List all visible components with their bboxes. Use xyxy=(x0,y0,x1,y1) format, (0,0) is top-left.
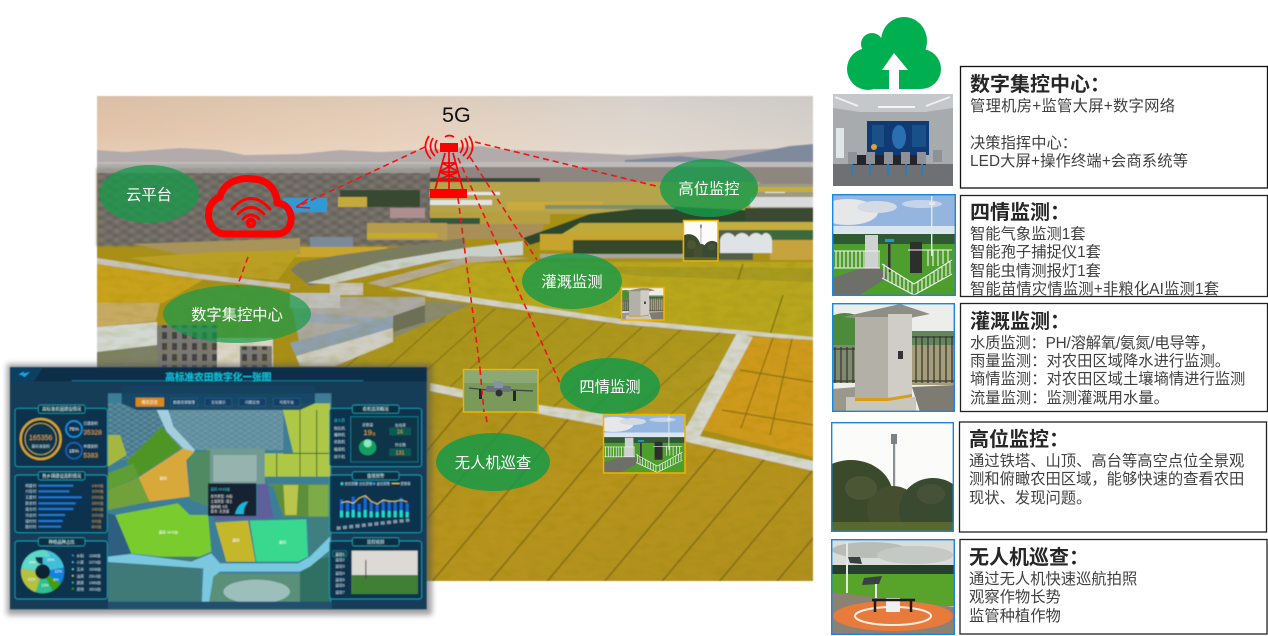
map fields: 播种期: 5月 xyxy=(211,504,228,509)
panel: dashboard screenshot: 虫情预警 xyxy=(367,472,385,479)
card: 无人机巡查: 无人机巡查： xyxy=(969,546,1089,569)
panel: dashboard screenshot: 种植品种占比 xyxy=(49,538,75,545)
panel: dashboard screenshot: 各乡镇建设面积情况 xyxy=(42,472,82,479)
pie chart: crop share: 19% xyxy=(29,560,37,564)
map fields: 土壤类型: 壤土 xyxy=(211,499,233,504)
chart: pest warning bars: 虫情预警 xyxy=(345,481,359,486)
gauge: total area: 35328 xyxy=(83,430,102,437)
gauge: total area: 已建面积 xyxy=(83,420,98,425)
card: 四情监测: 智能气象监测1套 xyxy=(970,225,1086,243)
label: 5G: 5G xyxy=(442,103,471,127)
dashboard panel frames xyxy=(15,408,422,599)
card: 数字集控中心: 决策指挥中心： xyxy=(970,135,1077,152)
thumbnail: tower xyxy=(677,220,722,265)
pie chart: crop share: 1816亩 xyxy=(89,586,101,591)
label bubble: 数字集控中心 xyxy=(163,285,311,343)
video preview: 监控7 xyxy=(335,589,345,594)
label bubble: 灌溉监测: 灌溉监测 xyxy=(541,274,603,291)
card: 四情监测 xyxy=(960,196,1268,298)
pie chart: crop share: 水稻 xyxy=(77,553,84,558)
panel: machinery stats: 播种机 xyxy=(334,432,345,437)
card: 四情监测: 智能苗情灾情监测+非粮化AI监测1套 xyxy=(970,280,1219,298)
panel: machinery stats: 作业数 xyxy=(395,442,406,447)
bar list: township area: 800亩 xyxy=(92,524,102,529)
gauge: total area: 165356 xyxy=(29,435,52,442)
map fields xyxy=(108,403,331,608)
gauge: total area: 高标准面积 xyxy=(32,444,50,449)
pie chart: crop share: 12% xyxy=(55,569,63,573)
label bubble: 四情监测 xyxy=(560,358,660,414)
bar list: township area: 1400亩 xyxy=(92,483,104,488)
map fields: 高标 44.5亩 xyxy=(159,529,178,534)
pie chart: crop share: 蔬菜 xyxy=(77,580,84,585)
card: 灌溉监测: 流量监测：监测灌溉用水量。 xyxy=(970,390,1169,407)
chart: pest warning bars: 灾情预警 xyxy=(359,481,373,486)
pie chart: crop share: 1486亩 xyxy=(89,580,101,585)
bar list: township area: 1500亩 xyxy=(92,501,104,506)
panel: machinery stats: 131 xyxy=(396,450,404,456)
video preview: 监控1 xyxy=(335,551,345,556)
pie chart: crop share: 2514亩 xyxy=(89,573,101,578)
panel: machinery stats: 总数量 xyxy=(362,422,373,427)
label bubble: 高位监控 xyxy=(660,159,758,217)
panel: machinery stats: 台 xyxy=(372,431,376,436)
bar list: township area: 1000亩 xyxy=(92,512,104,517)
bar list: township area: 2000亩 xyxy=(92,495,104,500)
bar list: township area: 南村村 xyxy=(25,518,37,523)
card: 高位监控: 测和俯瞰农田区域，能够快速的查看农田 xyxy=(969,471,1244,488)
dashboard header xyxy=(10,367,427,410)
video preview: 监控2 xyxy=(335,557,345,562)
card: 无人机巡查: 监管种植作物 xyxy=(969,608,1061,625)
card: 灌溉监测: 灌溉监测： xyxy=(970,310,1070,333)
video preview: 监控3 xyxy=(335,564,345,569)
dashboard header: 高标准农田数字化一张图 xyxy=(165,372,271,384)
panel: dashboard screenshot: 高标准农田建设情况 xyxy=(42,406,82,413)
card: 灌溉监测: 墒情监测：对农田区域土壤墒情进行监测 xyxy=(970,370,1245,388)
dashboard header: 可视平台 xyxy=(279,400,294,405)
gauge: total area: 5383 xyxy=(83,453,98,460)
pie chart: crop share: 2279亩 xyxy=(89,560,101,565)
pie chart: crop share: 8% xyxy=(53,578,59,582)
photo: control room xyxy=(833,94,953,186)
dashboard panel titles xyxy=(38,405,399,546)
label bubble: 无人机巡查 xyxy=(436,433,550,491)
gauge: total area: 15% xyxy=(69,448,80,454)
bar list: township area: 南方村 xyxy=(25,506,37,511)
card: 无人机巡查 xyxy=(960,540,1267,634)
bar list: township area: 1400亩 xyxy=(92,506,104,511)
label bubble: 四情监测: 四情监测 xyxy=(579,379,641,396)
gauge: total area: 75% xyxy=(69,427,80,433)
map fields: 基本: 无虫害 xyxy=(211,509,230,514)
pie chart: crop share xyxy=(28,553,101,591)
pie chart: crop share: 玉米 xyxy=(77,567,84,572)
dashboard header: 问题反馈 xyxy=(245,400,260,405)
dashboard header: 文化展示 xyxy=(211,400,226,405)
card: 高位监控 xyxy=(960,422,1266,532)
dashed links from 5G tower xyxy=(237,142,660,423)
bar list: township area: 兴旺村 xyxy=(25,489,37,494)
panel: dashboard screenshot: 农机监测概况 xyxy=(363,406,389,413)
pie chart: crop share: 1188亩 xyxy=(89,553,101,558)
card: 数字集控中心: 管理机房+监管大屏+数字网络 xyxy=(970,98,1175,115)
icon: red wifi cloud xyxy=(209,178,291,234)
map fields: 高标 xyxy=(160,475,167,480)
panel: machinery stats: 拖拉机 xyxy=(334,425,345,430)
panel: machinery stats: 植保机 xyxy=(334,447,345,452)
card: 灌溉监测 xyxy=(960,304,1268,412)
thumbnail: drone xyxy=(463,369,538,412)
pie chart: crop share: 22% xyxy=(28,578,36,582)
panel: machinery stats: 在线率 xyxy=(395,422,406,427)
panel: machinery stats: 总人员 xyxy=(334,417,345,422)
chart: pest warning bars: 苗情预警 xyxy=(377,481,391,486)
icon: 5G tower xyxy=(425,136,473,198)
chart: pest warning bars: 预警率 xyxy=(401,481,411,486)
label bubble: 无人机巡查: 无人机巡查 xyxy=(455,455,531,472)
card: 数字集控中心 xyxy=(960,66,1268,188)
panel: dashboard screenshot: 监控视频 xyxy=(367,538,385,545)
card: 无人机巡查: 观察作物长势 xyxy=(969,588,1061,606)
chart: pest warning bars xyxy=(337,481,411,528)
aerial farm photo xyxy=(97,96,813,581)
video preview: 监控6 xyxy=(335,583,345,588)
photo: irrigation cabinet xyxy=(821,303,955,412)
dashboard header: 数据资源管理 xyxy=(173,400,195,405)
pie chart: crop share: 13% xyxy=(41,584,49,588)
photo: four-condition station xyxy=(818,194,956,296)
panel: machinery stats: 19 xyxy=(363,428,372,437)
photo: high tower xyxy=(809,422,967,542)
label bubble: 灌溉监测 xyxy=(522,253,622,309)
card: 无人机巡查: 通过无人机快速巡航拍照 xyxy=(969,571,1137,588)
icon: green cloud upload xyxy=(847,17,941,90)
bar list: township area: 明星村 xyxy=(25,483,37,488)
red dash over drone thumbnail xyxy=(480,369,484,412)
pie chart: crop share: 油菜 xyxy=(77,573,84,578)
thumbnail: weather station xyxy=(594,414,685,473)
gauge: total area: 申建面积 xyxy=(83,444,98,449)
card: 数字集控中心: 数字集控中心： xyxy=(970,72,1110,96)
label bubble: 数字集控中心: 数字集控中心 xyxy=(191,307,283,324)
card: 数字集控中心: LED大屏+操作终端+会商系统等 xyxy=(970,152,1188,170)
bar list: township area xyxy=(25,483,104,529)
panel: machinery stats: 收割机 xyxy=(334,439,345,444)
card: 高位监控: 现状、发现问题。 xyxy=(969,490,1091,507)
card: 高位监控: 通过铁塔、山顶、高台等高空点位全景观 xyxy=(969,452,1244,470)
pie chart: crop share: 25% xyxy=(47,558,55,562)
map fields: 农作类型: 水稻 xyxy=(211,493,233,498)
dashboard header: 概览总览 xyxy=(142,399,158,405)
card: 四情监测: 智能虫情测报灯1套 xyxy=(970,262,1101,280)
map fields: 高标 xyxy=(279,539,287,544)
pie chart: crop share: 1638亩 xyxy=(89,567,101,572)
arrow head at cloud xyxy=(296,199,310,208)
photo: drone landing pad xyxy=(831,539,955,635)
panel: machinery stats xyxy=(334,417,418,462)
panel: machinery stats: 烘干机 xyxy=(334,454,345,459)
video preview: 监控5 xyxy=(335,577,345,582)
card: 灌溉监测: 水质监测：PH/溶解氧/氨氮/电导等， xyxy=(970,334,1215,352)
label bubble: 云平台: 云平台 xyxy=(126,187,172,204)
pie chart: crop share: 小麦 xyxy=(77,560,84,565)
bar list: township area: 胜村村 xyxy=(25,524,37,529)
label bubble: 高位监控: 高位监控 xyxy=(678,181,740,198)
pie chart: crop share: 其他 xyxy=(77,586,84,591)
label bubble: 云平台 xyxy=(99,165,199,223)
bar list: township area: 900亩 xyxy=(92,518,102,523)
gauge: total area xyxy=(21,419,102,460)
card: 四情监测: 智能孢子捕捉仪1套 xyxy=(970,243,1101,261)
bar list: township area: 河北村 xyxy=(25,512,37,517)
bar list: township area: 五星村 xyxy=(25,495,37,500)
map fields: 高标 44.63亩 xyxy=(211,487,231,492)
map fields: 高标 xyxy=(232,538,240,543)
panel: machinery stats: 16 xyxy=(397,430,403,436)
video preview xyxy=(333,551,418,594)
video preview: 监控4 xyxy=(335,570,345,575)
card: 高位监控: 高位监控： xyxy=(969,427,1069,451)
thumbnail: cabinet xyxy=(617,287,664,320)
bar list: township area: 新农村 xyxy=(25,501,37,506)
panel: dashboard screenshot xyxy=(7,364,432,615)
card: 灌溉监测: 雨量监测：对农田区域降水进行监测。 xyxy=(970,353,1230,370)
card: 四情监测: 四情监测： xyxy=(970,201,1070,224)
bar list: township area: 1200亩 xyxy=(92,489,104,494)
